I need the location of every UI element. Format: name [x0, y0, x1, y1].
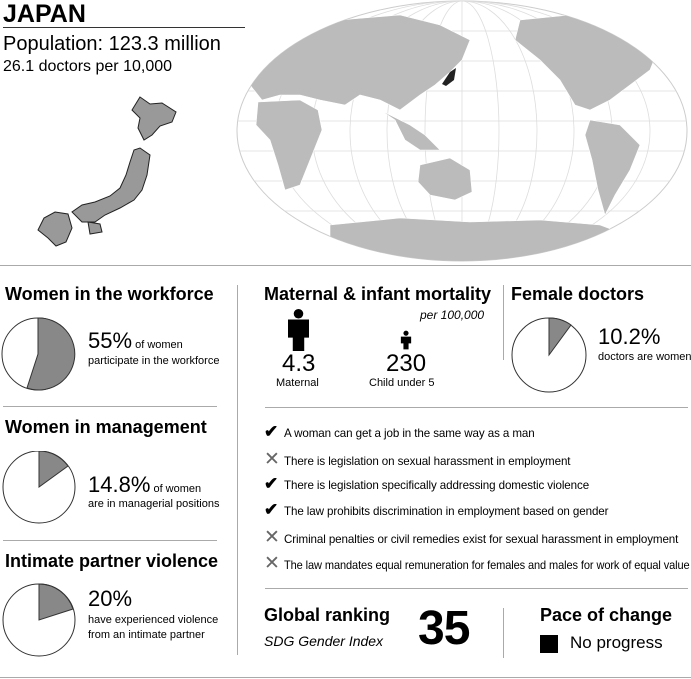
checklist: ✕: [264, 527, 280, 548]
panel: pace of change: [540, 605, 672, 653]
panel: pace of change: No progress: [570, 633, 663, 652]
map: world: [236, 0, 688, 262]
panel: maternal mortality: per 100,000: [420, 308, 484, 322]
panel: women in management: Women in management: [5, 417, 207, 437]
icon: maternal figure: [288, 309, 309, 351]
panel: global ranking: 35: [418, 602, 469, 655]
pie: doctors: [512, 318, 586, 392]
title: JAPAN: [3, 0, 86, 28]
panel: maternal mortality: Maternal & infant mortality: [264, 284, 491, 304]
panel: women in management: 14.8% of women: [88, 472, 201, 497]
panel: women in workforce: [2, 284, 219, 390]
panel: female doctors: doctors are women: [598, 351, 691, 363]
panel: global ranking: SDG Gender Index: [264, 633, 383, 649]
panel: maternal mortality: Maternal: [276, 377, 319, 389]
panel: female doctors: Female doctors: [511, 284, 644, 304]
pie: management: [2, 451, 76, 524]
panel: intimate partner violence: from an intimate partner: [88, 629, 205, 641]
checklist: There is legislation on sexual harassment in employment: [284, 455, 570, 468]
panel: pace of change: Pace of change: [540, 605, 672, 625]
panel: intimate partner violence: [2, 551, 218, 656]
checklist: ✔: [264, 500, 278, 519]
checklist: ✔: [264, 422, 278, 441]
checklist: ✕: [264, 553, 280, 574]
panel: maternal mortality: Child under 5: [369, 377, 434, 389]
panel: intimate partner violence: 20%: [88, 586, 132, 611]
checklist: A woman can get a job in the same way as a man: [284, 427, 535, 440]
panel: women in workforce: participate in the workforce: [88, 355, 219, 367]
checklist: Criminal penalties or civil remedies exist for sexual harassment in employment: [284, 533, 678, 546]
panel: women in workforce: 55% of women: [88, 328, 183, 353]
icon: child figure: [400, 330, 412, 350]
checklist: There is legislation specifically addressing domestic violence: [284, 479, 589, 492]
checklist: The law mandates equal remuneration for females and males for work of equal value: [284, 559, 690, 572]
checklist: The law prohibits discrimination in employment based on gender: [284, 505, 608, 518]
checklist: ✕: [264, 449, 280, 470]
checklist: ✔: [264, 474, 278, 493]
panel: global ranking: [264, 602, 470, 655]
checklist: [264, 422, 690, 574]
pie: workforce: [2, 318, 76, 390]
panel: women in management: [2, 417, 220, 524]
doctors text: 26.1 doctors per 10,000: [3, 58, 172, 75]
panel: intimate partner violence: have experienced violence: [88, 614, 218, 626]
icon: black square: [540, 635, 558, 653]
panel: women in workforce: Women in the workforce: [5, 284, 214, 304]
panel: female doctors: [511, 284, 691, 392]
panel: maternal mortality: 4.3: [282, 350, 315, 377]
panel: maternal mortality: [264, 284, 491, 389]
map: japan: [37, 96, 177, 247]
panel: female doctors: 10.2%: [598, 324, 660, 349]
panel: maternal mortality: 230: [386, 350, 426, 377]
panel: intimate partner violence: Intimate partner violence: [5, 551, 218, 571]
panel: global ranking: Global ranking: [264, 605, 390, 625]
population text: Population: 123.3 million: [3, 33, 221, 55]
pie: violence: [2, 584, 76, 656]
panel: women in management: are in managerial positions: [88, 498, 219, 510]
